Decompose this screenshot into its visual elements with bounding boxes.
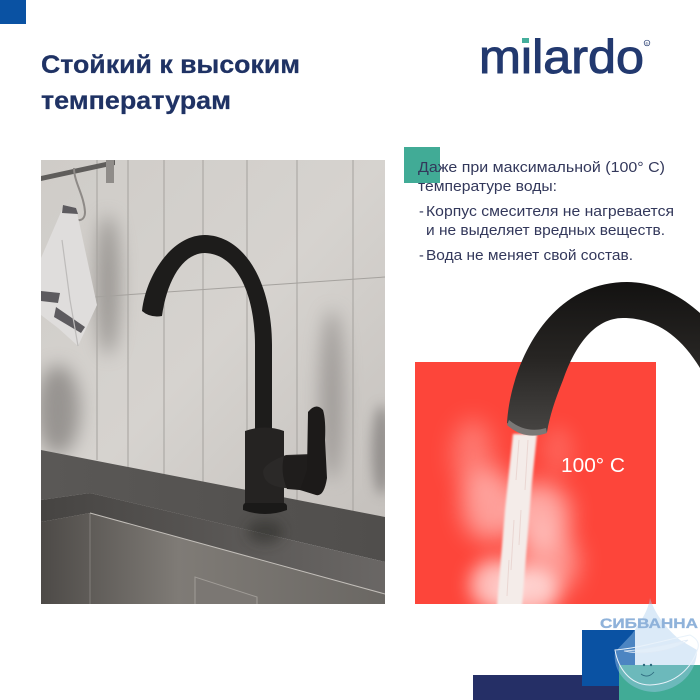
red heat panel with steam xyxy=(415,362,656,616)
description text: - xyxy=(419,248,424,264)
bottom corner blocks xyxy=(473,630,700,700)
logo: milardo: milardo xyxy=(479,30,644,83)
description text: и не выделяет вредных веществ. xyxy=(426,223,665,239)
photo: kitchen faucet xyxy=(36,160,392,604)
title: Стойкий к высоким xyxy=(41,51,300,79)
description text xyxy=(418,160,674,264)
watermark: sibvanna bath logo xyxy=(600,598,698,692)
steam clouds xyxy=(453,419,578,616)
title xyxy=(41,51,300,115)
tiled wall xyxy=(36,160,392,530)
teal accent square xyxy=(404,147,440,183)
temperature label: 100° C xyxy=(561,455,625,477)
logo: milardo: ® xyxy=(645,41,648,46)
title: температурам xyxy=(41,87,231,115)
description text: Корпус смесителя не нагревается xyxy=(426,204,674,220)
water stream xyxy=(497,434,537,606)
large spout close-up xyxy=(507,282,700,436)
watermark: sibvanna bath logo: СИБВАННА xyxy=(600,616,698,631)
towel rail and hook xyxy=(41,160,115,220)
counter and sink xyxy=(41,450,385,604)
black faucet xyxy=(142,235,327,514)
description text: - xyxy=(419,204,424,220)
description text: Вода не меняет свой состав. xyxy=(426,248,633,264)
description text: температуре воды: xyxy=(418,179,557,195)
hanging towel xyxy=(41,205,97,346)
description text: Даже при максимальной (100° С) xyxy=(418,160,665,176)
corner square: top left xyxy=(0,0,26,24)
